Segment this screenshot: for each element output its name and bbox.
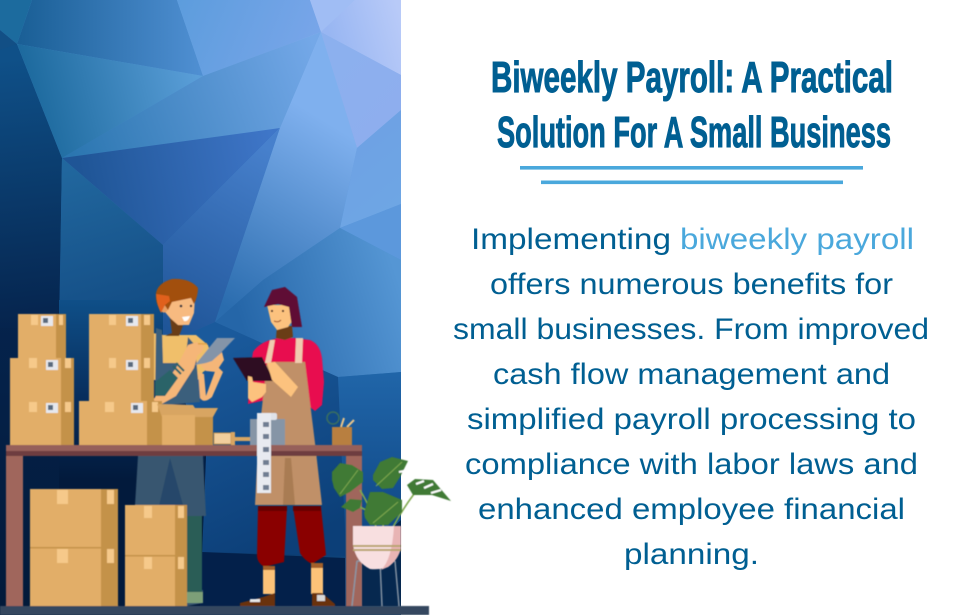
woman tablet xyxy=(233,357,274,381)
tape dispenser xyxy=(214,432,255,445)
leaf veins and holes xyxy=(340,462,441,523)
body paragraph: biweekly payroll xyxy=(680,223,914,256)
plant stems xyxy=(358,490,414,527)
man hair xyxy=(156,279,198,310)
panel: faceted blue background xyxy=(0,0,401,615)
box centre top xyxy=(89,314,154,357)
woman apron straps xyxy=(265,338,303,363)
man lower body xyxy=(135,456,206,606)
body paragraph: compliance with labor laws and xyxy=(465,448,918,481)
body paragraph: Implementing xyxy=(471,223,671,256)
man right arm xyxy=(198,366,223,401)
work table xyxy=(6,445,362,606)
man shirt xyxy=(153,333,214,380)
body paragraph: simplified payroll processing to xyxy=(467,403,916,436)
man left arm with tattoo xyxy=(153,345,199,405)
woman xyxy=(233,287,335,606)
woman smile and eyes xyxy=(271,310,284,322)
box left top xyxy=(18,314,66,358)
man neck and beard xyxy=(165,318,184,336)
large box stack xyxy=(30,489,118,606)
body paragraph: cash flow management and xyxy=(493,358,890,391)
man apron xyxy=(155,328,200,406)
woman hands xyxy=(248,362,298,402)
potted plant xyxy=(332,457,451,606)
flower pot xyxy=(353,526,401,570)
body paragraph: small businesses. From improved xyxy=(453,313,929,346)
box left middle xyxy=(10,358,74,401)
label strip over table xyxy=(257,445,271,493)
body paragraph: planning. xyxy=(624,538,759,571)
woman hair xyxy=(264,287,302,327)
pencil cup xyxy=(327,412,354,445)
floor xyxy=(0,606,429,615)
woman neck xyxy=(276,326,293,340)
woman red trousers xyxy=(257,506,326,567)
small box stack xyxy=(125,505,187,606)
woman shins and shoes xyxy=(240,563,335,606)
woman face xyxy=(267,305,293,330)
box centre bottom xyxy=(79,401,162,445)
man eye and smile xyxy=(180,305,192,321)
box centre middle xyxy=(89,357,154,401)
body paragraph: offers numerous benefits for xyxy=(490,268,893,301)
stacked boxes on table xyxy=(10,314,218,445)
illustration: warehouse scene xyxy=(0,279,451,615)
monstera leaves xyxy=(332,457,451,525)
woman apron xyxy=(255,362,322,505)
lower boxes xyxy=(30,489,187,606)
body paragraph: enhanced employee financial xyxy=(478,493,905,526)
plant stand xyxy=(352,561,399,606)
title xyxy=(491,53,893,157)
box left bottom xyxy=(10,401,74,445)
label printer xyxy=(250,413,285,493)
man hands xyxy=(186,342,224,372)
man upper body xyxy=(153,279,235,406)
label strip xyxy=(257,413,271,493)
title underlines xyxy=(520,166,863,184)
man tablet xyxy=(195,338,235,365)
man face xyxy=(165,298,195,325)
woman sweater xyxy=(248,338,324,411)
open box xyxy=(157,404,218,445)
body paragraph xyxy=(453,223,929,571)
